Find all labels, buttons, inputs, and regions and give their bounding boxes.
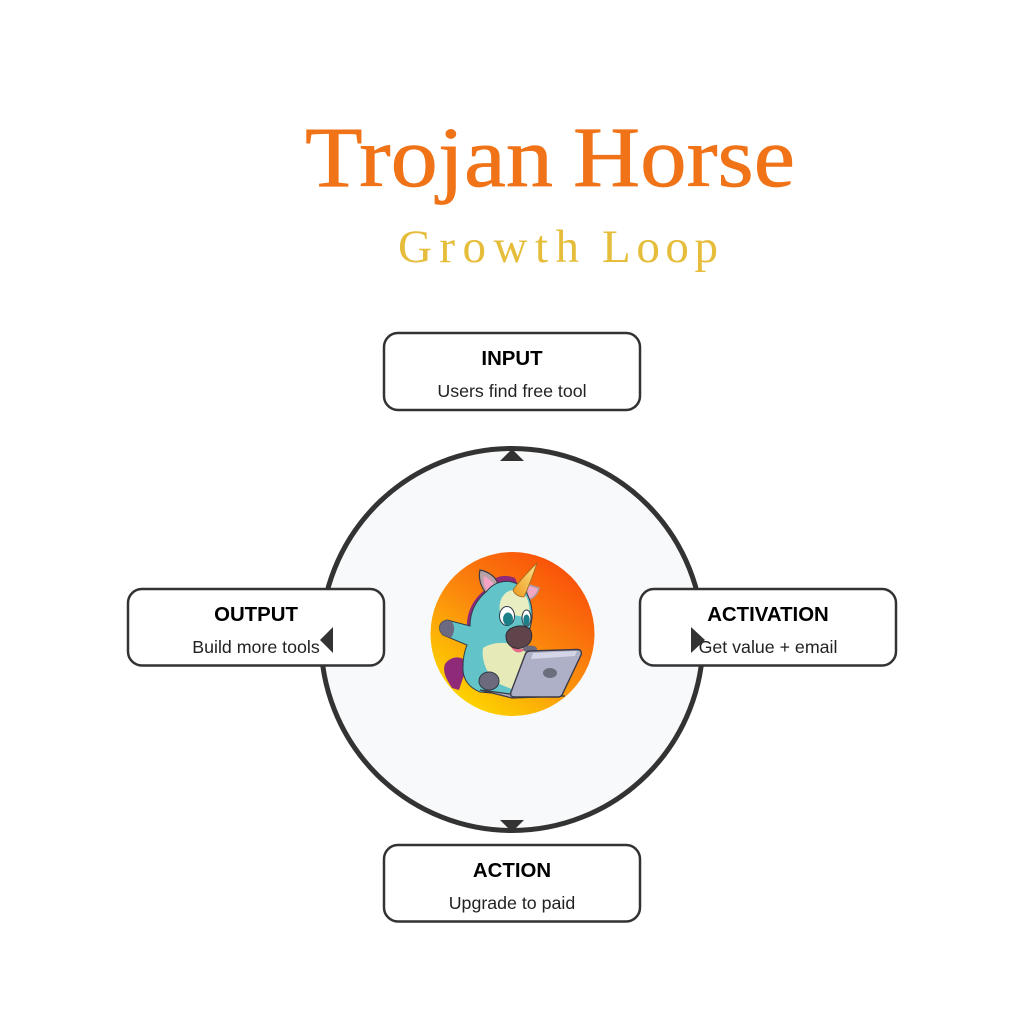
- panel: input: [384, 333, 640, 410]
- panel: activation: [640, 589, 896, 666]
- subtitle: Loop: [602, 221, 718, 273]
- icon: left ear: [479, 570, 498, 594]
- icon: apple logo: [543, 668, 557, 678]
- panel: output: OUTPUT: [214, 604, 298, 626]
- subtitle: Growth: [398, 221, 579, 273]
- panel: input: INPUT: [481, 348, 543, 370]
- panel: action: ACTION: [473, 860, 551, 882]
- title: [305, 109, 795, 205]
- icon: hand: [523, 646, 537, 652]
- panel: activation: Get value + email: [699, 637, 837, 657]
- arrow: up to input: [500, 449, 524, 461]
- subtitle: [398, 221, 718, 273]
- icon: horn: [513, 563, 537, 597]
- arrow: down to action: [500, 820, 524, 832]
- arrow: left to output: [320, 627, 333, 653]
- icon: gradient disc: [430, 552, 594, 716]
- loop circle: [321, 448, 703, 830]
- icon: left eye: [500, 606, 514, 626]
- icon: laptop screen: [511, 650, 581, 697]
- icon: foot: [479, 672, 499, 690]
- icon: laptop base: [480, 690, 565, 698]
- panel: input: Users find free tool: [437, 381, 587, 401]
- icon: right eye: [522, 610, 531, 626]
- central unicorn illustration: [430, 552, 594, 716]
- icon: body: [440, 581, 532, 695]
- icon: snout: [506, 626, 532, 648]
- icon: left ear inner: [484, 576, 494, 591]
- icon: tail: [444, 657, 465, 690]
- panel: output: [128, 589, 384, 666]
- arrow: right to activation: [691, 627, 705, 653]
- title: Trojan: [305, 109, 553, 205]
- panel: action: Upgrade to paid: [449, 893, 575, 913]
- panel: output: Build more tools: [192, 637, 320, 657]
- icon: laptop highlight: [531, 651, 577, 659]
- icon: right ear: [526, 584, 539, 600]
- icon: mouth: [509, 642, 527, 652]
- icon: face: [500, 590, 529, 618]
- icon: arm tip: [440, 620, 454, 638]
- icon: belly: [483, 643, 528, 690]
- panel: activation: ACTIVATION: [707, 604, 829, 626]
- panel: action: [384, 845, 640, 922]
- title: Horse: [573, 109, 795, 205]
- icon: mane: [467, 576, 520, 630]
